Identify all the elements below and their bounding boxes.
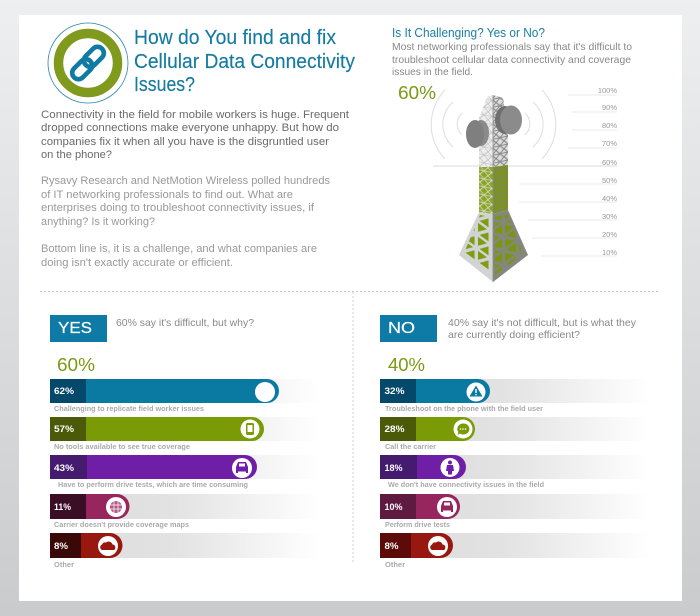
research text block: enterprises doing to troubleshoot connectivity issues, if [41,202,315,214]
bar: 28% call carrier: Call the carrier [385,442,436,451]
horizontal dotted divider [40,290,658,292]
vertical dotted divider [352,292,354,562]
bar: 11% coverage maps: 11% [54,502,71,513]
intro text block: dropped connections make everyone unhappy. But how do [41,122,339,134]
bar: 32% on the phone [380,379,650,413]
bar: 8% other: Other [54,560,74,569]
bar: 28% call carrier [380,417,650,451]
research text block: anything? Is it working? [41,216,155,228]
yes badge [50,315,107,342]
bar: 10% drive tests: Perform drive tests [385,520,450,529]
research text block: of IT networking professionals to find out. What are [41,189,293,201]
icon: car [437,497,457,517]
icon: cloud [98,536,118,556]
bottom line text block: Bottom line is, it is a challenge, and what companies are [41,243,317,255]
challenge description: troubleshoot cellular data connectivity and coverage [392,54,631,66]
icon: chain link badge [48,23,128,103]
intro text block [41,109,349,161]
tower scale: 30% [602,212,617,221]
icon: globe [106,497,126,517]
yes percent: 60% [57,355,95,375]
intro text block: Connectivity in the field for mobile workers is huge. Frequent [41,109,349,121]
icon: chat [454,420,472,438]
no question: are currently doing efficient? [448,329,580,341]
bar: 18% no issues: 18% [384,463,403,474]
tower upper right face [493,95,508,167]
icon: person [440,458,460,477]
bar: 32% on the phone: Troubleshoot on the phone with the field user [385,404,543,413]
bar: 8% other [50,533,320,569]
bar: 11% coverage maps [50,494,320,529]
tower base left face [459,212,493,282]
signal arcs [431,90,556,159]
bottom line text block: doing isn't exactly accurate or efficient. [41,257,233,269]
bar: 11% coverage maps: Carrier doesn't provide coverage maps [54,520,189,529]
tower scale: 80% [602,121,617,130]
bar: 28% call carrier: 28% [384,424,405,435]
bar: 43% drive tests: Have to perform drive tests, which are time consuming [58,480,248,489]
bar: 8% other: 8% [384,541,399,552]
panel: yes [50,315,320,569]
bar: 62% replicate issues: Challenging to replicate field worker issues [54,404,204,413]
panel: no [380,315,650,569]
bar: 62% replicate issues: 62% [54,386,75,397]
no badge [380,315,437,342]
cell tower illustration [459,95,528,282]
tower base right face [493,210,528,282]
tower percent value: 60% [398,83,436,103]
tower scale [433,86,617,257]
bar: 10% drive tests: 10% [384,502,403,513]
bar: 57% no tools: No tools available to see true coverage [54,442,190,451]
tower lower shaft right [493,165,508,214]
research text block: Rysavy Research and NetMotion Wireless polled hundreds [41,175,331,187]
bar: 8% other: 8% [54,541,69,552]
bar: 43% drive tests: 43% [54,463,75,474]
tower scale: 50% [602,176,617,185]
intro text block: on the phone? [41,149,112,161]
icon: warning [466,382,486,402]
tower centre edge [492,95,494,282]
intro text block: companies fix it when all you have is the disgruntled user [41,136,329,148]
bar: 57% no tools [50,417,320,451]
no question [448,317,637,341]
bottom line text block [41,243,317,269]
bar: 8% other [380,533,650,569]
icon: car [232,458,252,478]
tower scale: 70% [602,139,617,148]
heading: is it challenging: Is It Challenging? Yes or No? [392,26,545,40]
challenge description: issues in the field. [392,66,473,78]
tower lower shaft left [479,167,493,214]
tower scale: 100% [598,86,617,95]
right dish [495,106,515,134]
challenge description: Most networking professionals say that it's difficult to [392,41,632,53]
left dish [473,120,489,146]
no badge: NO [388,320,415,337]
bar: 62% replicate issues [50,379,320,413]
bar: 10% drive tests [380,494,650,529]
tower scale: 40% [602,194,617,203]
no percent: 40% [388,355,425,375]
bar: 32% on the phone: 32% [384,386,405,397]
challenge description [392,41,632,78]
bar: 43% drive tests [50,455,320,489]
research text block [41,175,331,228]
icon: phone [240,420,260,438]
title [134,27,355,96]
tower scale: 90% [602,103,617,112]
tower upper left face [479,95,493,167]
bar: 57% no tools: 57% [54,424,75,435]
bar: 18% no issues: We don't have connectivity issues in the field [388,480,544,489]
tower scale: 10% [602,248,617,257]
bar: 18% no issues [380,455,650,489]
tower scale: 60% [602,158,617,167]
icon: cloud [428,536,448,556]
title: How do You find and fix [134,27,336,49]
title: Cellular Data Connectivity [134,51,355,73]
yes question: 60% say it's difficult, but why? [116,317,254,329]
no question: 40% say it's not difficult, but is what they [448,317,637,329]
tower scale: 20% [602,230,617,239]
yes badge: YES [58,320,92,337]
bar: 8% other: Other [385,560,405,569]
title: Issues? [134,74,195,96]
